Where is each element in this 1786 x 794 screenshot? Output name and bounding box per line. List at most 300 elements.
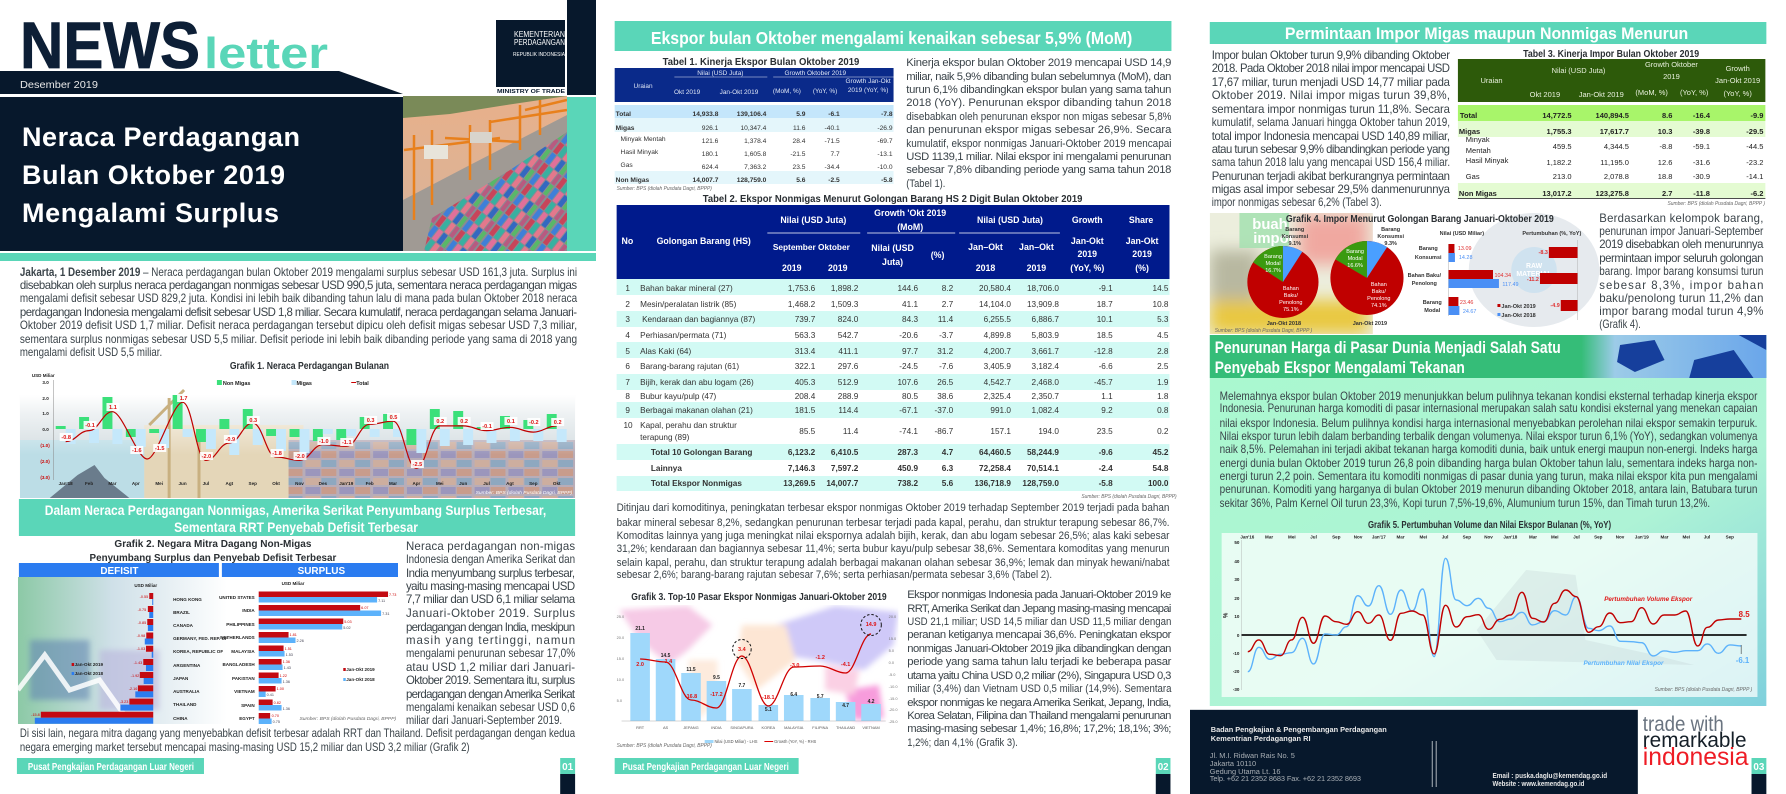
text: import paragraph: kumulatif, selama Januari hingga Oktober tahun 2019, bbox=[1212, 117, 1450, 129]
table 2: nonmigas exports by HS group: 739.7 bbox=[795, 314, 816, 324]
labels: deficit countries: GERMANY, FED. REP. OF bbox=[173, 636, 228, 641]
axis: months: Mei bbox=[436, 481, 444, 486]
logo: trade with remarkable indonesia: remarkable bbox=[1643, 729, 1747, 752]
chart: Grafik 5 export growth: Jan'18 bbox=[1503, 534, 1518, 540]
table 1: export performance: 10,347.4 bbox=[740, 125, 767, 132]
data labels: total balance: -2.0 bbox=[202, 454, 211, 460]
bars: export value bbox=[630, 633, 881, 721]
value labels: 4.2 bbox=[868, 699, 875, 705]
series labels: Pertumbuhan Nilai Ekspor bbox=[1583, 660, 1664, 667]
panel header: surplus: SURPLUS bbox=[298, 566, 345, 577]
page number 01 bbox=[560, 758, 575, 794]
table 3: import performance: 2.7 bbox=[1662, 189, 1672, 198]
text: intro paragraph: Jakarta, 1 Desember 2019 – Neraca perdagangan bulan Oktober 2019 mengalami surplus sebesar USD 161,3 juta. Surplus ini bbox=[20, 267, 577, 279]
table 2: nonmigas exports by HS group: 1.8 bbox=[1157, 391, 1169, 401]
footer panel: contact information: Jakarta 10110 bbox=[1210, 759, 1256, 768]
table 2: nonmigas exports by HS group: 97.7 bbox=[902, 346, 918, 356]
table 2: nonmigas exports by HS group: 14,007.7 bbox=[826, 478, 859, 488]
page 3 bbox=[1190, 22, 1766, 794]
table 2: nonmigas exports by HS group: 208.4 bbox=[795, 391, 816, 401]
heading: Ekspor bulan Oktober bbox=[615, 21, 1171, 51]
main title panel: Bulan Oktober 2019 bbox=[22, 160, 285, 190]
chart: Grafik 1 monthly trade balance: 0.0 bbox=[42, 427, 49, 432]
text: import paragraph: impor nonmigas sebesar 6,2% (Tabel 3). bbox=[1212, 197, 1382, 209]
bars: import value: 23.46 bbox=[1460, 300, 1473, 306]
table 2: nonmigas exports by HS group: 542.7 bbox=[838, 330, 859, 340]
chart: Grafik 5 export growth: Jan'16 bbox=[1240, 534, 1255, 540]
bars: import value: Konsumsi bbox=[1415, 255, 1442, 261]
table 2: nonmigas exports by HS group: 4 bbox=[625, 330, 630, 340]
logo: trade with remarkable indonesia: trade with bbox=[1643, 713, 1724, 736]
table 2: nonmigas exports by HS group: 2018 bbox=[976, 263, 995, 273]
text: goods group paragraph bbox=[1599, 213, 1764, 331]
table 2: nonmigas exports by HS group: 54.8 bbox=[1153, 463, 1169, 473]
text: import paragraph bbox=[1212, 50, 1451, 209]
table 2: nonmigas exports by HS group: 322.1 bbox=[795, 361, 816, 371]
value labels: 4.7 bbox=[842, 703, 849, 709]
text: goods group paragraph: baku/penolong turun 11,2% dan bbox=[1599, 293, 1763, 305]
table 2: nonmigas exports by HS group: 405.3 bbox=[795, 377, 816, 387]
bars: import value: 14.28 bbox=[1459, 255, 1472, 261]
chart: Grafik 1 monthly trade balance: USD Miliar bbox=[32, 373, 55, 378]
panel header: surplus bbox=[222, 563, 398, 577]
table 3: import performance bbox=[1458, 59, 1765, 207]
legend: deficit: Jan-Okt 2019 bbox=[75, 662, 104, 667]
series labels: Pertumbuhan Volume Ekspor bbox=[1604, 596, 1693, 603]
page number 01: 01 bbox=[562, 762, 574, 773]
table 2: nonmigas exports by HS group: 6,123.2 bbox=[788, 447, 816, 457]
background: fruit photo: buah bbox=[1252, 217, 1288, 233]
legend: surplus: Jan-Okt 2018 bbox=[346, 677, 375, 682]
legend bbox=[1497, 304, 1536, 319]
table 1: export performance: 14,007.7 bbox=[693, 177, 719, 184]
table 2: nonmigas exports by HS group: Nilai (USD Juta) bbox=[977, 215, 1043, 225]
axis: months: Agt bbox=[226, 481, 234, 486]
chart: Grafik 2 trade partners: 1.22 bbox=[280, 674, 287, 678]
data labels: total balance: -1.5 bbox=[155, 446, 164, 452]
chart: Grafik 2 trade partners: 5.03 bbox=[344, 620, 352, 624]
table 1: export performance: 1,605.8 bbox=[744, 151, 767, 158]
table 2: nonmigas exports by HS group: 64,460.5 bbox=[979, 447, 1011, 457]
banner: Penurunan Harga: Penurunan Harga di Pasar Dunia Menjadi Salah Satu bbox=[1215, 338, 1561, 357]
text: import paragraph: Penurunan terjadi akibat berkurangnya permintaan bbox=[1212, 171, 1450, 183]
chart: Grafik 2 trade partners: 1.51 bbox=[285, 647, 292, 651]
table 3: import performance: Mentah bbox=[1466, 146, 1491, 155]
text: intro paragraph: perdagangan Indonesia mengalami defisit sebesar USD 1,8 miliar. Secara kumulatif, neraca perdagangan selama Januari- bbox=[20, 307, 577, 319]
table 2: nonmigas exports by HS group: 6,255.5 bbox=[984, 314, 1011, 324]
table 3: import performance: Growth bbox=[1726, 64, 1750, 73]
axis labels: 20.0 bbox=[889, 614, 897, 619]
chart: Grafik 5 export growth: Mei bbox=[1551, 534, 1559, 540]
chart: Grafik 5 export growth: 50 bbox=[1234, 540, 1240, 545]
table 2: nonmigas exports by HS group: 85.5 bbox=[799, 426, 816, 436]
chart: Grafik 5 export growth: Nov bbox=[1354, 534, 1363, 540]
chart: Grafik 5 export growth: -30 bbox=[1233, 687, 1240, 692]
table 3: import performance: Nilai (USD Juta) bbox=[1552, 66, 1606, 75]
axis labels: 5.0 bbox=[889, 648, 895, 653]
table 1: export performance: 926.1 bbox=[702, 125, 719, 132]
table 1: export performance: -21.5 bbox=[790, 151, 806, 158]
table 2: nonmigas exports by HS group: Bijih, kerak dan abu logam (26) bbox=[640, 377, 754, 387]
banner: Penurunan Harga: Penyebab Ekspor Mengalami Tekanan bbox=[1215, 358, 1465, 377]
bars: import growth bbox=[1522, 231, 1581, 320]
table 2: nonmigas exports by HS group: 70,514.1 bbox=[1027, 463, 1059, 473]
table 3: import performance: -59.1 bbox=[1693, 142, 1710, 151]
table 2: nonmigas exports by HS group: (%) bbox=[1135, 263, 1149, 273]
chart: Grafik 3 top-10 export markets: -4.1 bbox=[841, 662, 850, 668]
axis labels: -20.0 bbox=[889, 707, 898, 712]
chart: Grafik 1 monthly trade balance: 2.0 bbox=[42, 396, 49, 401]
chart: Grafik 4 imports by goods group: RAW bbox=[1526, 263, 1543, 270]
text: nonmigas paragraph: masih yang tertinggi, namun bbox=[406, 635, 575, 647]
chart: Grafik 3 top-10 export markets: 3.4 bbox=[738, 647, 747, 653]
axis: months: Jun bbox=[459, 481, 467, 486]
pie: Jan-Okt 2018: 16.7% bbox=[1265, 268, 1281, 274]
text: export paragraph: USD 1139,1 miliar. Nilai ekspor ini mengalami penurunan bbox=[906, 151, 1171, 163]
table 2: nonmigas exports by HS group: Growth 'Okt 2019 bbox=[874, 208, 946, 218]
table 2: nonmigas exports by HS group: Share bbox=[1129, 215, 1153, 225]
table 2: nonmigas exports by HS group: 3,405.9 bbox=[984, 361, 1011, 371]
table 3: import performance: 1,755.3 bbox=[1547, 127, 1572, 136]
labels: surplus countries: EGYPT bbox=[239, 716, 255, 721]
chart: Grafik 5 export growth: Jan'17 bbox=[1372, 534, 1386, 540]
bars: import value: 13.09 bbox=[1458, 246, 1471, 252]
table 3: import performance: 1,182.2 bbox=[1547, 158, 1572, 167]
page 2 bbox=[615, 21, 1177, 794]
table 2: nonmigas exports by HS group: 8.2 bbox=[942, 283, 954, 293]
axis: months: Jan'19 bbox=[339, 481, 354, 486]
heading: Dalam Neraca Perdagangan Nonmigas: Sementara RRT Penyebab Defisit Terbesar bbox=[174, 520, 419, 535]
chart: Grafik 3 top-10 export markets: JEPANG bbox=[683, 725, 699, 730]
bars: import growth: -4.9 bbox=[1550, 303, 1560, 309]
table 2: nonmigas exports by HS group: Lainnya bbox=[651, 463, 682, 473]
data labels: total balance: -0.9 bbox=[226, 437, 235, 443]
table 1: export performance: Total bbox=[616, 111, 631, 118]
chart: Grafik 3 top-10 export markets: -16.8 bbox=[685, 694, 697, 700]
text: commodity paragraph bbox=[617, 502, 1170, 581]
chart: Grafik 2 trade partners: -0.55 bbox=[140, 595, 148, 599]
text: market paragraph: utama yaitu China USD 0,2 miliar (2%), Singapura USD 0,3 bbox=[907, 670, 1171, 682]
text: export paragraph: 2018 (YoY). Penurunan ekspor dibanding tahun 2018 bbox=[906, 97, 1171, 109]
axis: months: Nov bbox=[295, 481, 304, 486]
table 1: export performance: 7.7 bbox=[830, 151, 840, 158]
chart: Grafik 2 trade partners: 7.11 bbox=[378, 599, 385, 603]
table 1: export performance: -10.0 bbox=[877, 164, 893, 171]
chart: Grafik 2 trade partners: 1.00 bbox=[277, 687, 284, 691]
chart: Grafik 2 trade partners: -0.98 bbox=[137, 634, 145, 638]
table 2: nonmigas exports by HS group: 1 bbox=[625, 283, 630, 293]
chart: Grafik 3 top-10 export markets: 14.9 bbox=[866, 622, 876, 628]
bars: import growth: Pertumbuhan (%, YoY) bbox=[1522, 231, 1581, 237]
legend: deficit: Jan-Okt 2018 bbox=[75, 671, 104, 676]
table 2: nonmigas exports by HS group: 7,146.3 bbox=[788, 463, 816, 473]
table 3: import performance: 2019 bbox=[1663, 72, 1680, 81]
table 3: import performance: 12.6 bbox=[1658, 158, 1672, 167]
chart: Grafik 2 trade partners: 2.26 bbox=[297, 639, 304, 643]
table 1: export performance: 5.9 bbox=[796, 111, 806, 118]
table 3: import performance: Migas bbox=[1459, 127, 1480, 136]
logo: trade with remarkable indonesia bbox=[1643, 713, 1749, 771]
chart: Grafik 2 trade partners: Sumber: BPS (diolah Pusdata Dagri, BPPP) bbox=[299, 716, 397, 722]
pie: Jan-Okt 2018: Konsumsi bbox=[1281, 234, 1309, 240]
table 1: export performance: Okt 2019 bbox=[674, 89, 701, 96]
table 3: import performance: (MoM, %) bbox=[1635, 88, 1668, 97]
table 1: export performance: -34.4 bbox=[825, 164, 840, 171]
bars: import value: 24.67 bbox=[1463, 309, 1476, 315]
text: export paragraph: sebesar 7,8% dibanding periode yang sama tahun 2018 bbox=[906, 164, 1171, 176]
table 2: nonmigas exports by HS group: 6 bbox=[625, 361, 630, 371]
chart: Grafik 2 trade partners bbox=[18, 563, 398, 724]
bars: import value: Penolong bbox=[1412, 281, 1437, 287]
labels: deficit countries: CHINA bbox=[173, 716, 188, 721]
text: goods group paragraph: permintaan impor seluruh golongan bbox=[1599, 253, 1763, 265]
table 2: nonmigas exports by HS group: 2019 bbox=[828, 263, 848, 273]
axis labels bbox=[617, 614, 898, 724]
table 3: import performance: Okt 2019 bbox=[1530, 90, 1560, 99]
table 2: nonmigas exports by HS group: (%) bbox=[931, 250, 944, 260]
table 2: nonmigas exports by HS group: 1.9 bbox=[1157, 377, 1169, 387]
pie: Jan-Okt 2019: 74.1% bbox=[1371, 303, 1387, 309]
panel header: defisit: DEFISIT bbox=[100, 566, 138, 577]
table 1: export performance: Nilai (USD Juta) bbox=[697, 70, 743, 77]
table 3: import performance: (YoY, %) bbox=[1680, 88, 1709, 97]
table 1: export performance: Jan-Okt 2019 bbox=[720, 89, 759, 96]
data labels: total balance: -0.2 bbox=[529, 420, 539, 426]
callouts: dashed circles bbox=[733, 614, 881, 658]
heading: Grafik 2 bbox=[90, 539, 336, 564]
table 2: nonmigas exports by HS group: 144.6 bbox=[897, 283, 918, 293]
pie: Jan-Okt 2018: Baku/ bbox=[1284, 293, 1298, 299]
table 2: nonmigas exports by HS group: -45.7 bbox=[1094, 377, 1113, 387]
axis labels: -5.0 bbox=[889, 672, 896, 677]
pie: Jan-Okt 2018: 75.1% bbox=[1283, 307, 1299, 313]
ministry logo: KEMENTERIAN bbox=[514, 30, 565, 39]
chart: Grafik 3 top-10 export markets: Sumber: BPS (diolah Pusdata Dagri, BPPP) bbox=[617, 743, 712, 749]
series labels bbox=[1583, 596, 1693, 667]
legend: deficit bbox=[72, 662, 104, 676]
table 2: nonmigas exports by HS group: 4.5 bbox=[1157, 330, 1169, 340]
text: market paragraph: nonmigas Januari-Oktober 2019 jika dibandingkan dengan bbox=[907, 643, 1171, 655]
pie: Jan-Okt 2018: Jan-Okt 2018 bbox=[1267, 321, 1301, 327]
chart: Grafik 1 monthly trade balance: 1.0 bbox=[42, 411, 49, 416]
chart: Grafik 3 top-10 export markets: -3.0 bbox=[790, 663, 799, 669]
chart: Grafik 5 export growth: Mar bbox=[1397, 534, 1405, 540]
table 2: nonmigas exports by HS group: Perhiasan/permata (71) bbox=[640, 330, 727, 340]
table 2: nonmigas exports by HS group: 7 bbox=[625, 377, 630, 387]
chart: Grafik 3 top-10 export markets: -1.4 bbox=[663, 659, 673, 665]
legend: surplus bbox=[343, 667, 375, 682]
chart: Grafik 5 export growth: -10 bbox=[1233, 651, 1240, 656]
text: import paragraph: 2018. Pada Oktober 2018 nilai impor mencapai USD bbox=[1212, 63, 1450, 75]
bars: deficit countries bbox=[41, 593, 153, 718]
axis: months: Jun bbox=[179, 481, 187, 486]
chart: Grafik 3 top-10 export markets: 2.0 bbox=[636, 662, 644, 668]
chart: Grafik 5 export growth: Sumber: BPS (diolah Pusdata Dagri, BPPP ) bbox=[1655, 687, 1753, 693]
pie: Jan-Okt 2019: Jan-Okt 2019 bbox=[1353, 321, 1387, 327]
background: fruit photo bbox=[1210, 213, 1373, 334]
table 2: nonmigas exports by HS group: 6,410.5 bbox=[831, 447, 859, 457]
text: bottom paragraph: Di sisi lain, negara mitra dagang yang menyebabkan defisit terbesar adalah RRT dan Thailand. Defisit perdagangan dengan kedua bbox=[20, 728, 576, 740]
text: intro paragraph: mengalami defisit sebesar USD 829,2 juta. Kondisi ini lebih baik dibanding tahun lalu di mana pada bulan Oktober 2018 neraca bbox=[20, 293, 578, 305]
table 2: nonmigas exports by HS group: 10 bbox=[623, 420, 633, 430]
bars: non migas bbox=[56, 395, 557, 445]
bars: import value: Modal bbox=[1424, 308, 1441, 314]
text: nonmigas paragraph: mengalami kenaikan sebesar USD 0,6 bbox=[406, 702, 575, 714]
footer tag page 2 bbox=[615, 758, 799, 774]
table 2: nonmigas exports by HS group: 1.1 bbox=[1101, 391, 1113, 401]
text: export paragraph: (Tabel 1). bbox=[906, 178, 945, 190]
chart: Grafik 5 export growth: Jan'19 bbox=[1635, 534, 1649, 540]
table 2: nonmigas exports by HS group: Jan-Okt bbox=[1071, 236, 1104, 246]
table 2: nonmigas exports by HS group: Total Ekspor Nonmigas bbox=[651, 478, 742, 488]
table 2: nonmigas exports by HS group: 2 bbox=[625, 299, 630, 309]
text: nonmigas paragraph: perdagangan dengan Amerika Serikat bbox=[406, 689, 576, 701]
text: intro paragraph bbox=[20, 267, 578, 359]
table 1: export performance: Non Migas bbox=[616, 177, 650, 184]
data labels: total balance: 0.2 bbox=[436, 419, 444, 425]
table 2: nonmigas exports by HS group: 6.3 bbox=[942, 463, 954, 473]
page number 02 bbox=[1156, 758, 1170, 794]
table 2: nonmigas exports by HS group: 450.9 bbox=[897, 463, 918, 473]
chart: Grafik 5 export growth: Mei bbox=[1682, 534, 1690, 540]
axis labels: -10.0 bbox=[889, 684, 898, 689]
table 1: export performance: -40.1 bbox=[825, 125, 840, 132]
heading: Grafik 1: Grafik 1. Neraca Perdagangan Bulanan bbox=[230, 361, 389, 372]
table 2: nonmigas exports by HS group: 411.1 bbox=[838, 346, 859, 356]
footer panel: contact information bbox=[1190, 710, 1638, 794]
table 3: import performance: -11.8 bbox=[1693, 189, 1710, 198]
chart: Grafik 5 export growth: Mei bbox=[1420, 534, 1427, 540]
table 2: nonmigas exports by HS group: 2.5 bbox=[1157, 361, 1169, 371]
chart: Grafik 3 top-10 export markets: INDIA bbox=[711, 725, 722, 730]
labels: deficit countries: BRAZIL bbox=[173, 610, 190, 615]
labels: surplus countries bbox=[219, 595, 255, 721]
chart: Grafik 3 top-10 export markets: FILIPINA bbox=[812, 725, 828, 730]
table 1: export performance: Sumber: BPS (diolah Pusdata Dagri, BPPP) bbox=[617, 186, 712, 192]
chart: Grafik 2 trade partners: 1.43 bbox=[284, 666, 291, 670]
labels: surplus countries: BANGLADESH bbox=[222, 662, 255, 667]
table 2: nonmigas exports by HS group: 26.5 bbox=[937, 377, 954, 387]
pie: Jan-Okt 2019: Penolong bbox=[1367, 296, 1390, 302]
data labels: total balance: -1.6 bbox=[132, 448, 142, 454]
text: export paragraph: turun 6,1% dibandingkan ekspor bulan yang sama tahun bbox=[906, 84, 1171, 96]
legend: Growth (YoY, %) - RHS bbox=[774, 739, 817, 744]
bars: migas bbox=[66, 429, 567, 455]
table 1: export performance: -2.5 bbox=[828, 177, 840, 184]
line: volume ekspor bbox=[1248, 590, 1741, 656]
table 2: nonmigas exports by HS group: Kapal, perahu dan struktur bbox=[640, 420, 737, 430]
table 1: export performance: 5.6 bbox=[796, 177, 806, 184]
heading: Grafik 3: Grafik 3. Top-10 Pasar Ekspor Nonmigas Januari-Oktober 2019 bbox=[631, 592, 887, 603]
table 1: export performance: -13.1 bbox=[877, 151, 893, 158]
table 2: nonmigas exports by HS group: -20.6 bbox=[899, 330, 918, 340]
table 2: nonmigas exports by HS group: 991.0 bbox=[990, 405, 1011, 415]
chart: Grafik 5 export growth: -20 bbox=[1233, 669, 1240, 674]
pie: Jan-Okt 2019: Bahan bbox=[1371, 282, 1387, 288]
chart: Grafik 5 export growth: Nov bbox=[1616, 534, 1625, 540]
labels: deficit countries: USD Miliar bbox=[134, 583, 157, 588]
table 2: nonmigas exports by HS group: Nilai (USD bbox=[871, 243, 914, 253]
table 2: nonmigas exports by HS group: 0.8 bbox=[1157, 405, 1169, 415]
footer panel: contact information: Gedung Utama Lt. 16 bbox=[1210, 767, 1280, 776]
text: nonmigas paragraph: Oktober 2019. Sementara itu, surplus bbox=[406, 675, 575, 687]
axis: months: Okt bbox=[272, 481, 280, 486]
table 2: nonmigas exports by HS group: 45.2 bbox=[1153, 447, 1169, 457]
table 1: export performance: (MoM, %) bbox=[773, 88, 801, 95]
table 1: export performance: -7.8 bbox=[881, 111, 893, 118]
table 1: export performance: Uraian bbox=[634, 83, 653, 90]
table 2: nonmigas exports by HS group: 2019 bbox=[1027, 263, 1046, 273]
table 1: export performance: 23.5 bbox=[793, 164, 806, 171]
table 2: nonmigas exports by HS group: 2,468.0 bbox=[1032, 377, 1059, 387]
chart: Grafik 1 monthly trade balance: 3.0 bbox=[42, 380, 49, 385]
text: commodity paragraph: selain kapal, perahu, dan struktur terapung adalah berbagai makanan olahan sebesar 36,9%; lemak dan minyak hewani/nabat bbox=[617, 557, 1170, 569]
bars: import growth: -11.2 bbox=[1527, 277, 1539, 283]
table 1: export performance: 180.1 bbox=[702, 151, 719, 158]
pie: Jan-Okt 2018 bbox=[1247, 227, 1319, 327]
legend: surplus: Jan-Okt 2019 bbox=[346, 667, 375, 672]
banner: Penurunan Harga bbox=[1210, 335, 1766, 378]
table 2: nonmigas exports by HS group: 2,350.7 bbox=[1032, 391, 1059, 401]
table 2: nonmigas exports by HS group: 1,898.2 bbox=[831, 283, 859, 293]
ministry logo: REPUBLIK INDONESIA bbox=[513, 52, 566, 58]
main title panel: Neraca Perdagangan bbox=[22, 122, 300, 152]
table 1: export performance: 2019 (YoY, %) bbox=[848, 87, 888, 94]
axis: months: Jul bbox=[483, 481, 490, 486]
chart: Grafik 2 trade partners: -0.75 bbox=[138, 608, 146, 612]
heading: Tabel 2: Tabel 2. Ekspor Nonmigas Menurut Golongan Barang HS 2 Digit Bulan Oktober 2019 bbox=[703, 194, 1083, 205]
text: commodity paragraph: Komoditas lainnya yang juga meningkat nilai ekspornya adalah bijih, kerak, dan abu logam sebesar 26,5%; alas kaki sebesar bbox=[617, 530, 1170, 542]
data labels: total balance: -2.5 bbox=[413, 462, 422, 468]
table 3: import performance: Gas bbox=[1466, 172, 1480, 181]
heading: Permintaan Impor: Permintaan Impor Migas maupun Nonmigas Menurun bbox=[1285, 25, 1688, 43]
table 2: nonmigas exports by HS group: 4,200.7 bbox=[984, 346, 1011, 356]
table 3: import performance: 213.0 bbox=[1553, 172, 1572, 181]
table 1: export performance: 624.4 bbox=[702, 164, 719, 171]
chart: Grafik 2 trade partners: 0.41 bbox=[267, 693, 274, 697]
text: import paragraph: sementara impor nonmigas turun 11,8%. Secara bbox=[1212, 104, 1451, 116]
text: market paragraph: RRT, Amerika Serikat dan Jepang masing-masing mencapai bbox=[907, 603, 1171, 615]
chart: Grafik 2 trade partners: 0.82 bbox=[274, 701, 281, 705]
table 3: import performance: Minyak bbox=[1466, 135, 1490, 144]
page edge tab bbox=[567, 0, 596, 251]
text: market paragraph: masing-masing sebesar 1,4%; 16,8%; 17,2%; 18,1%; 3%; bbox=[907, 723, 1171, 735]
table 2: nonmigas exports by HS group: 181.5 bbox=[795, 405, 816, 415]
table 3: import performance: Non Migas bbox=[1459, 189, 1497, 198]
text: nonmigas paragraph: atau USD 1,2 miliar dari Januari- bbox=[406, 662, 575, 674]
bars: import value: 117.49 bbox=[1502, 282, 1519, 288]
heading: Permintaan Impor bbox=[1210, 22, 1766, 44]
legend: Jan-Okt 2019 bbox=[1501, 304, 1536, 310]
axis labels: 15.0 bbox=[617, 656, 625, 661]
data labels: total balance: -0.1 bbox=[85, 423, 95, 429]
axis: months: Sep bbox=[249, 481, 257, 486]
data labels: total balance: 0.2 bbox=[460, 419, 468, 425]
chart: Grafik 4 imports by goods group: Sumber: BPS (diolah Pusdata Dagri, BPPP ) bbox=[1215, 328, 1313, 334]
text: bottom paragraph bbox=[20, 728, 576, 754]
axis: months: Okt bbox=[553, 481, 561, 486]
text: intro paragraph: Oktober 2019 defisit USD 1,7 miliar. Defisit neraca perdagangan tersebut dipicu oleh defisit migas sebesar USD 7,3 miliar, bbox=[20, 320, 577, 332]
axis: months: Apr bbox=[412, 481, 421, 486]
chart: Grafik 5 export growth: Sep bbox=[1332, 534, 1341, 540]
value labels: 11.5 bbox=[686, 667, 696, 673]
text: intro paragraph: mengalami defisit USD 5,5 miliar. bbox=[20, 347, 162, 359]
bars: import growth: -8.3 bbox=[1539, 250, 1548, 256]
pie: Jan-Okt 2018: 9.1% bbox=[1289, 241, 1301, 247]
table 3: import performance: -44.5 bbox=[1746, 142, 1763, 151]
pie: Jan-Okt 2018: Barang bbox=[1285, 227, 1305, 233]
table 2: nonmigas exports by HS group: Growth bbox=[1072, 215, 1103, 225]
